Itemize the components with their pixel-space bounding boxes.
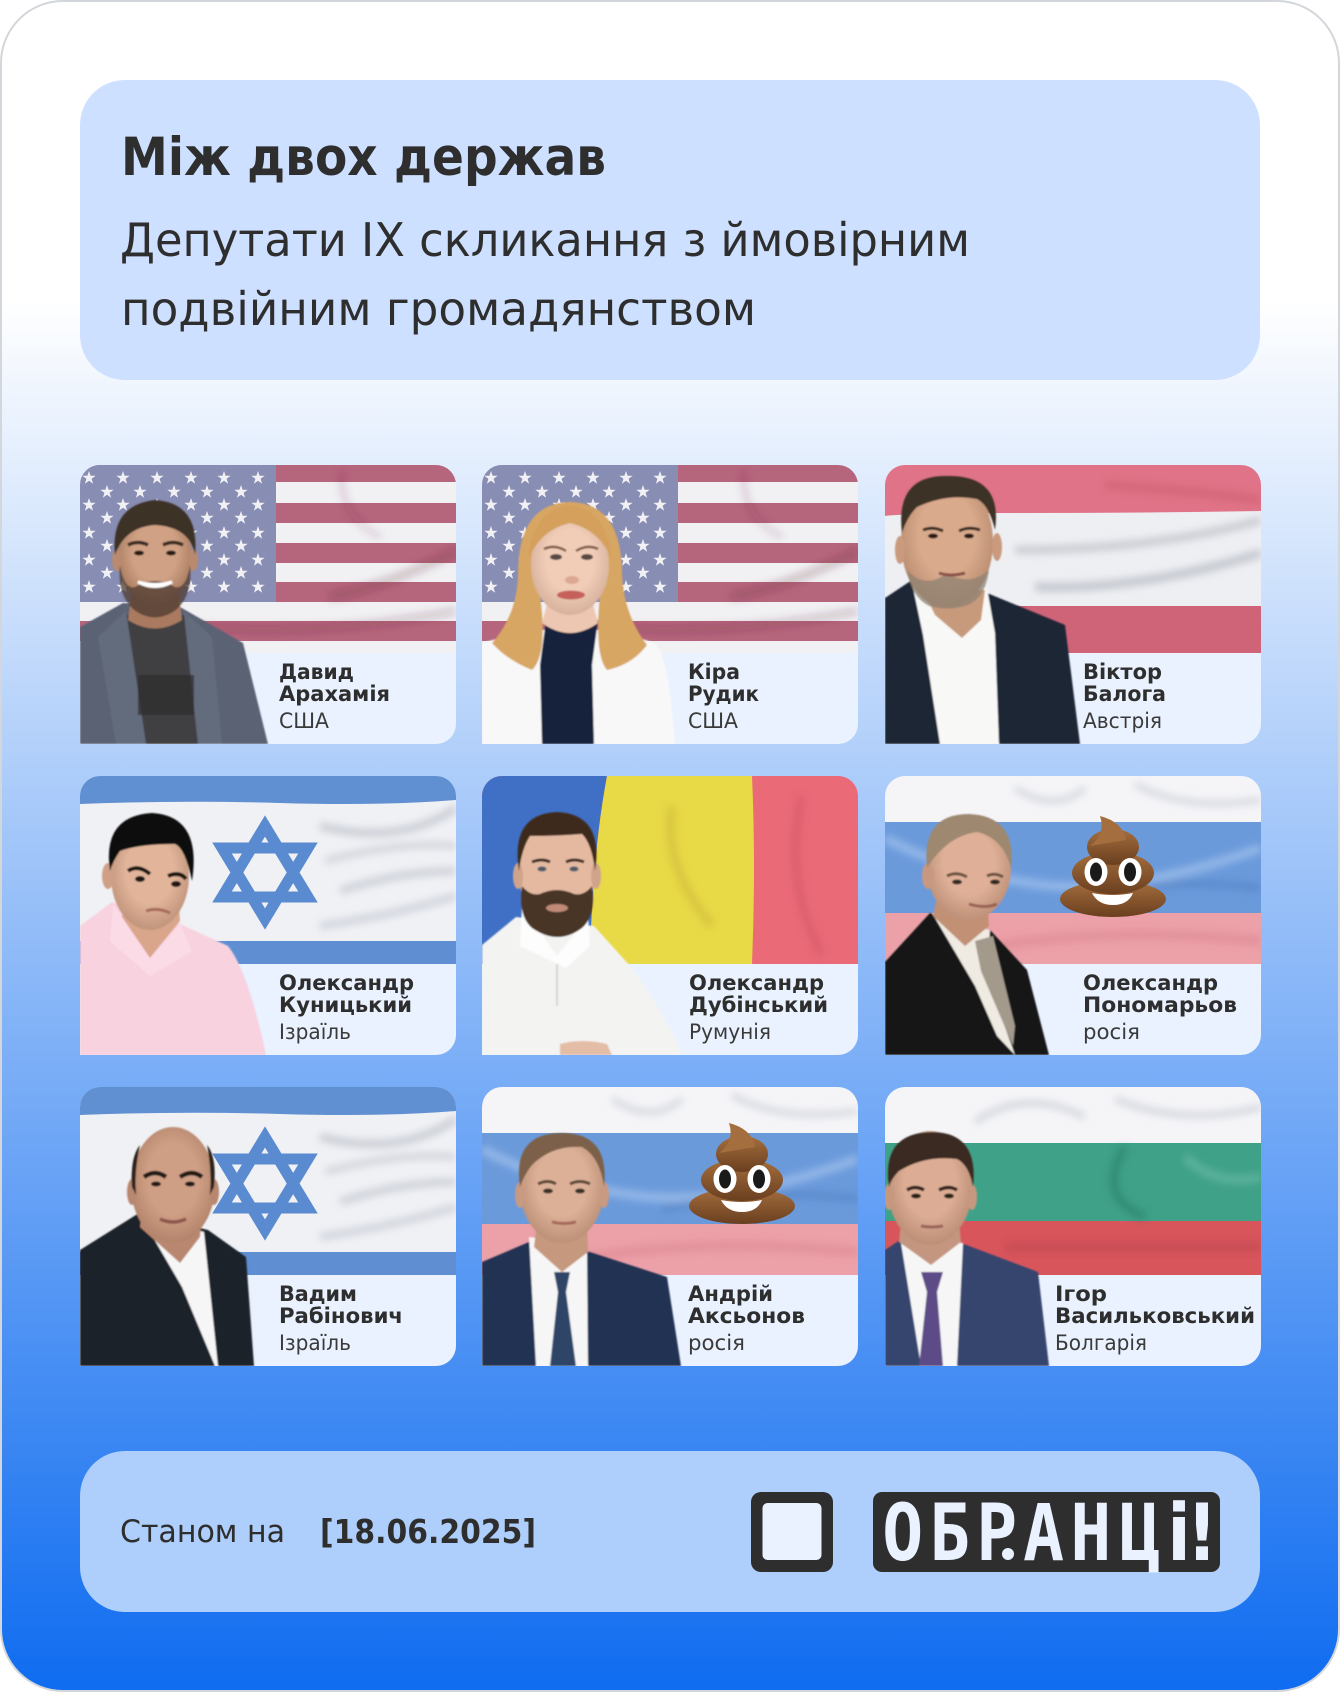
icon: poop emoji bbox=[1060, 816, 1166, 917]
name: Олександр bbox=[279, 971, 414, 996]
flag: Romania bbox=[482, 776, 858, 964]
surname: Арахамія bbox=[279, 682, 390, 707]
subtitle line 1: Депутати ІХ скликання з ймовірним bbox=[120, 213, 970, 267]
name: Олександр bbox=[1083, 971, 1218, 996]
name panel bbox=[482, 964, 858, 1055]
name panel bbox=[885, 653, 1261, 744]
country: росія bbox=[688, 1331, 745, 1355]
surname: Балога bbox=[1083, 682, 1166, 707]
country: росія bbox=[1083, 1020, 1140, 1044]
card: Віктор Балога bbox=[885, 465, 1261, 744]
flag: USA bbox=[80, 465, 456, 653]
title: Між двох держав bbox=[121, 127, 606, 188]
card: Олександр Пономарьов bbox=[885, 776, 1261, 1055]
card: Олександр Куницький bbox=[80, 776, 456, 1055]
panel: header bbox=[80, 80, 1260, 380]
name: Ігор bbox=[1055, 1282, 1107, 1307]
logo: wordmark: ОБРАНЦ bbox=[882, 1488, 1160, 1579]
flag: Austria bbox=[885, 465, 1261, 653]
country: США bbox=[688, 709, 739, 733]
name: Віктор bbox=[1083, 660, 1162, 685]
name: Кіра bbox=[688, 660, 740, 685]
logo: square icon bbox=[751, 1492, 833, 1572]
card: Ігор Васильковський bbox=[884, 1087, 1261, 1366]
panel: footer bbox=[80, 1451, 1260, 1612]
card: Вадим Рабінович bbox=[80, 1087, 456, 1366]
portrait bbox=[482, 812, 682, 1055]
country: Ізраїль bbox=[279, 1331, 351, 1355]
name panel bbox=[80, 1275, 456, 1366]
surname: Рудик bbox=[688, 682, 759, 707]
icon: poop emoji bbox=[689, 1123, 795, 1224]
portrait bbox=[884, 1131, 1049, 1366]
card: Давид Арахамія bbox=[80, 465, 456, 744]
country: Румунія bbox=[689, 1020, 771, 1044]
surname: Куницький bbox=[279, 993, 412, 1018]
date: [18.06.2025] bbox=[320, 1512, 536, 1551]
surname: Васильковський bbox=[1055, 1304, 1255, 1329]
name: Вадим bbox=[279, 1282, 357, 1307]
name panel bbox=[482, 653, 858, 744]
surname: Пономарьов bbox=[1083, 993, 1237, 1018]
portrait bbox=[80, 500, 268, 744]
flag: Bulgaria bbox=[885, 1087, 1261, 1275]
flag: Israel bbox=[80, 776, 456, 964]
flag: russia bbox=[885, 776, 1261, 964]
name: Олександр bbox=[689, 971, 824, 996]
portrait bbox=[80, 1127, 254, 1366]
surname: Аксьонов bbox=[688, 1304, 805, 1329]
name panel bbox=[482, 1275, 858, 1366]
name: Андрій bbox=[688, 1282, 773, 1307]
portrait bbox=[482, 1133, 681, 1366]
surname: Рабінович bbox=[279, 1304, 403, 1329]
portrait bbox=[885, 814, 1049, 1055]
card: Андрій Аксьонов bbox=[482, 1087, 858, 1366]
name panel bbox=[80, 964, 456, 1055]
name panel bbox=[80, 653, 456, 744]
country: Австрія bbox=[1083, 709, 1162, 733]
flag: Israel bbox=[80, 1087, 456, 1275]
portrait bbox=[80, 813, 266, 1055]
name panel bbox=[885, 964, 1261, 1055]
flag: USA bbox=[482, 465, 858, 653]
name: Давид bbox=[279, 660, 354, 685]
subtitle line 2: подвійним громадянством bbox=[121, 282, 756, 336]
country: США bbox=[279, 709, 330, 733]
flag: russia bbox=[482, 1087, 858, 1275]
country: Болгарія bbox=[1055, 1331, 1147, 1355]
portrait bbox=[482, 502, 675, 744]
date label: Станом на bbox=[120, 1514, 285, 1550]
surname: Дубінський bbox=[689, 993, 828, 1018]
logo: wordmark: і! bbox=[1167, 1488, 1218, 1579]
country: Ізраїль bbox=[279, 1020, 351, 1044]
name panel bbox=[885, 1275, 1261, 1366]
portrait bbox=[885, 476, 1080, 744]
card: Кіра Рудик bbox=[482, 465, 858, 744]
card: Олександр Дубінський bbox=[482, 776, 858, 1055]
